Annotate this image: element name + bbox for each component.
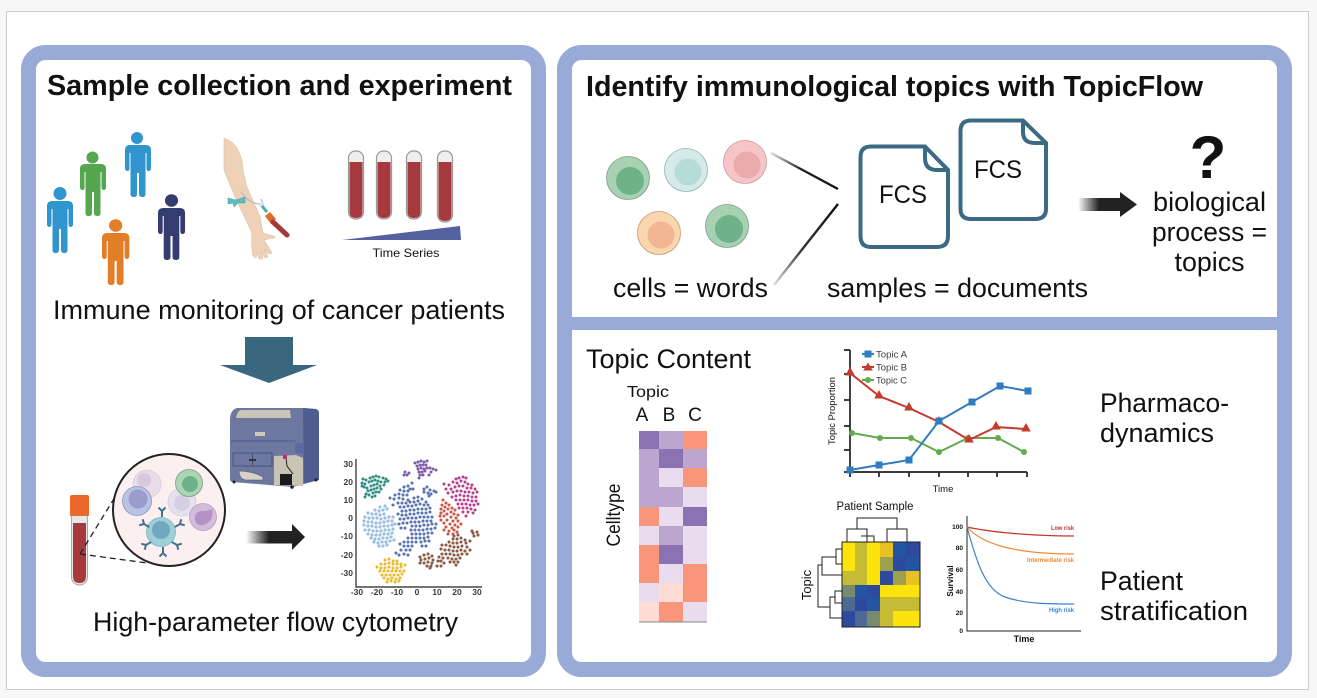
chart: survival curves: 0: [959, 628, 963, 635]
panel: sample collection and experiment: [28, 52, 538, 670]
chart: tSNE scatter: -30: [341, 568, 353, 578]
label: topic axis: Topic: [799, 569, 814, 600]
chart: topic proportion lines: [827, 350, 1032, 495]
label: patient sample: Patient Sample: [836, 501, 914, 513]
label: pharmacodynamics: [1100, 388, 1229, 448]
chart: survival curves: 20: [956, 610, 963, 617]
time wedge: [342, 226, 461, 240]
chart: survival curves: 80: [956, 545, 963, 552]
icon: flow cytometer: [230, 408, 319, 489]
chart: survival curves: 40: [956, 589, 963, 596]
chart: survival curves: [946, 516, 1081, 644]
series: topic B: [845, 367, 1031, 442]
chart: tSNE scatter: 20: [452, 587, 462, 597]
column labels: [636, 405, 702, 426]
cluster: magenta: [444, 477, 478, 516]
series: topic A: [846, 382, 1032, 474]
heading: topic content: Topic Content: [586, 344, 751, 374]
chart: survival curves: High risk: [1049, 607, 1074, 614]
chart: tSNE scatter: 10: [432, 587, 442, 597]
column labels: B: [663, 405, 675, 426]
cluster: teal: [362, 476, 388, 497]
series: topic C: [849, 430, 1027, 455]
chart: tSNE scatter: 0: [415, 587, 420, 597]
chart: survival curves: Survival: [946, 565, 955, 597]
icon: FCS document 1: FCS: [879, 181, 927, 209]
connector lines: [771, 153, 838, 285]
legend: Topic A: [876, 350, 908, 360]
label: biological process = topics: [1152, 187, 1267, 277]
chart: tSNE scatter: -20: [371, 587, 383, 597]
icon: FCS document 2: [960, 120, 1046, 219]
legend: Topic C: [876, 376, 907, 386]
arrow: down: [220, 337, 317, 383]
chart: patient heatmap: [818, 518, 920, 627]
question mark: ?: [1190, 124, 1226, 191]
panel: TopicFlow: [564, 52, 1284, 670]
zoom circle: immune cells: [113, 454, 225, 566]
chart: tSNE scatter: 30: [472, 587, 482, 597]
chart: survival curves: 60: [956, 567, 963, 574]
caption: flow cytometry: High-parameter flow cytometry: [93, 607, 458, 637]
heading: sample collection: Sample collection and experiment: [47, 70, 512, 102]
chart: survival curves: 100: [952, 524, 963, 531]
icon: blood tubes time series: [342, 151, 461, 260]
chart: tSNE scatter: 20: [344, 477, 353, 487]
label: pharmacodynamics: Pharmaco-: [1100, 388, 1229, 418]
label: time series: Time Series: [372, 246, 440, 260]
legend: [862, 350, 908, 386]
chart: tSNE scatter: [341, 459, 482, 597]
cluster: yellow: [377, 559, 405, 582]
icon: sample tube: [70, 495, 89, 585]
cluster: main blue: [390, 483, 436, 555]
chart: tSNE scatter: 0: [348, 513, 353, 523]
label: samples = documents: samples = documents: [827, 273, 1088, 303]
heading: TopicFlow: Identify immunological topics with TopicFlow: [586, 71, 1203, 103]
cluster: brown: [420, 531, 478, 568]
cluster: light blue: [364, 506, 395, 546]
chart: topic proportion lines: Topic Proportion: [827, 377, 838, 445]
zoom lines: [80, 497, 147, 563]
chart: tSNE scatter: 30: [344, 459, 353, 469]
chart: tSNE scatter: -20: [341, 550, 353, 560]
chart: tSNE scatter: -10: [341, 531, 353, 541]
column labels: A: [636, 405, 649, 426]
label: patient stratification: [1100, 566, 1248, 626]
chart: tSNE scatter: 10: [344, 495, 353, 505]
label: celltype: Celltype: [604, 484, 625, 546]
chart: survival curves: Time: [1014, 634, 1034, 644]
icon: cells: [606, 140, 766, 254]
chart: survival curves: Low risk: [1051, 525, 1074, 532]
chart: topic content heatmap: [639, 431, 707, 622]
cluster: purple: [404, 461, 436, 478]
label: patient stratification: stratification: [1100, 596, 1248, 626]
arrow: to scatter: [246, 524, 305, 550]
chart: survival curves: Intermediate risk: [1027, 557, 1074, 564]
caption: immune monitoring: Immune monitoring of cancer patients: [53, 295, 505, 325]
label: biological process = topics: topics: [1174, 247, 1244, 277]
column labels: C: [688, 405, 702, 426]
label: Topic: Topic: [627, 384, 669, 401]
icon: FCS document 2: FCS: [974, 156, 1022, 184]
icon: FCS document 1: [860, 146, 948, 247]
label: cells = words: cells = words: [613, 273, 768, 303]
chart: tSNE scatter: -30: [351, 587, 363, 597]
label: biological process = topics: biological: [1153, 187, 1266, 217]
icon: patients group: [47, 132, 185, 285]
legend: Topic B: [876, 362, 907, 374]
chart: tSNE scatter: -10: [391, 587, 403, 597]
icon: arm blood draw: [224, 138, 287, 259]
arrow: to topics: [1078, 192, 1137, 217]
label: biological process = topics: process =: [1152, 217, 1267, 247]
chart: topic proportion lines: Time: [933, 484, 953, 495]
cluster: red: [440, 500, 461, 534]
label: pharmacodynamics: dynamics: [1100, 418, 1214, 448]
label: patient stratification: Patient: [1100, 566, 1183, 596]
